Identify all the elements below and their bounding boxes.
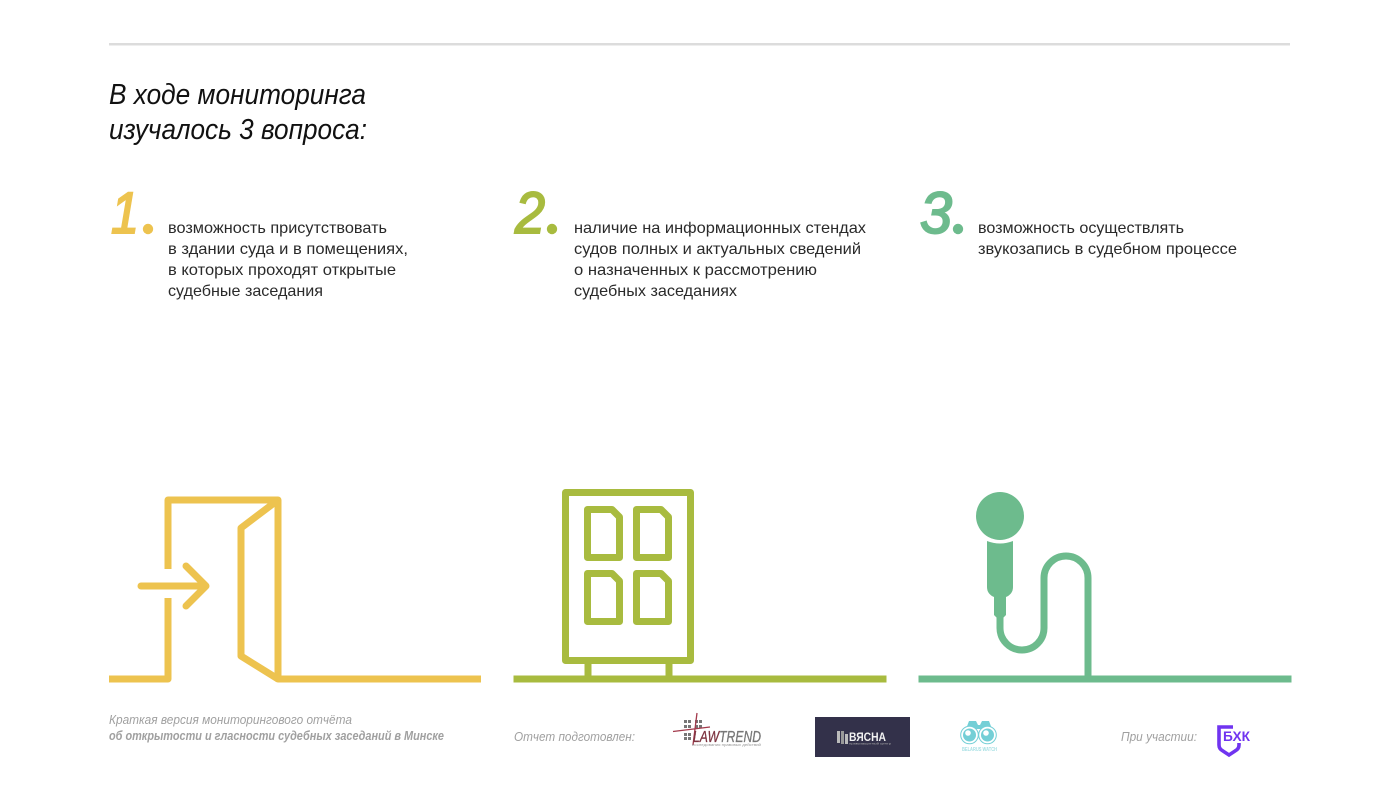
- text of question 1: в которых проходят открытые: [168, 262, 396, 279]
- logo: BHK: БХК: [1223, 729, 1251, 744]
- text of question 3: возможность осуществлять: [978, 220, 1184, 237]
- text of question 2: судов полных и актуальных сведений: [574, 241, 861, 258]
- text of question 2: [574, 220, 866, 300]
- title: [109, 79, 367, 146]
- logo: Viasna: правозащитный центр: [849, 742, 891, 746]
- icon: microphone with cable: [918, 492, 1292, 679]
- text of question 3: звукозапись в судебном процессе: [978, 241, 1237, 258]
- footer: report description: [109, 713, 444, 743]
- logo: Viasna: [815, 717, 910, 757]
- question 1: [111, 181, 408, 300]
- number 3: 3: [920, 181, 952, 246]
- title: В ходе мониторинга: [109, 79, 366, 111]
- text of question 2: о назначенных к рассмотрению: [574, 262, 817, 279]
- text of question 2: судебных заседаниях: [574, 283, 737, 300]
- question 3: [920, 181, 1237, 258]
- documents on board: [588, 510, 668, 622]
- text of question 3: [978, 220, 1237, 258]
- text of question 1: в здании суда и в помещениях,: [168, 241, 408, 258]
- footer: report description: Краткая версия мониторингового отчёта: [109, 713, 352, 727]
- text of question 2: наличие на информационных стендах: [574, 220, 866, 237]
- number 1: 1: [111, 181, 139, 246]
- logo: Lawtrend: [673, 713, 761, 747]
- logo: Lawtrend: LAWTREND: [693, 729, 761, 746]
- icon: open door with arrow: [109, 500, 481, 679]
- footer: with participation: При участии:: [1121, 730, 1197, 744]
- text of question 1: судебные заседания: [168, 283, 323, 300]
- question 2: [514, 181, 866, 300]
- logo: Belarus Watch: [961, 721, 997, 753]
- text of question 1: возможность присутствовать: [168, 220, 387, 237]
- logo: Lawtrend: исследования правовых действий: [692, 743, 761, 747]
- text of question 1: [168, 220, 408, 300]
- footer: report description: об открытости и гласности судебных заседаний в Минске: [109, 729, 444, 743]
- logo: Viasna: ВЯСНА: [849, 732, 886, 744]
- title: изучалось 3 вопроса:: [109, 114, 367, 146]
- arrow: [141, 566, 206, 606]
- logo: BHK: [1219, 727, 1251, 755]
- logo: Belarus Watch: BELARUS WATCH: [962, 747, 997, 753]
- footer: prepared by: Отчет подготовлен:: [514, 730, 635, 744]
- icon: information board: [514, 492, 886, 679]
- number 2: 2: [514, 181, 545, 246]
